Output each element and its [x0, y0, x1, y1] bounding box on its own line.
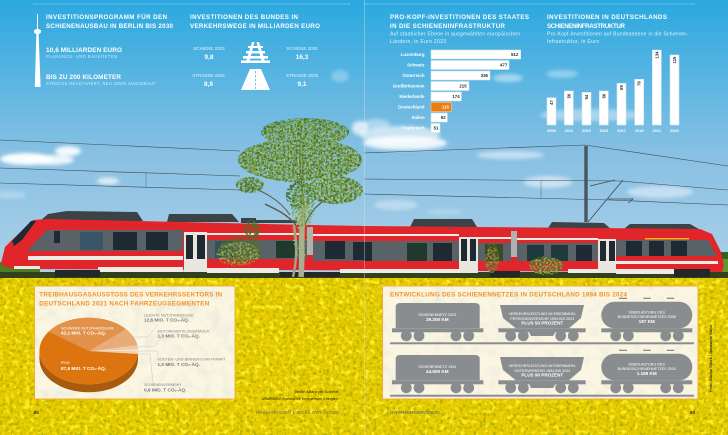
- rail 2025 value: 16,3: [296, 54, 309, 61]
- heading: emissions: TREIBHAUSGASAUSSTOSS DES VERKEHRSSEKTORS IN: [39, 292, 222, 299]
- wagon: freight traffic: VERKEHRSLEISTUNG IM EISENBAHN-: [509, 364, 577, 368]
- bar chart: countries: Italien: [412, 115, 425, 120]
- roof equipment: [40, 211, 704, 232]
- dark foliage layer: [236, 118, 363, 209]
- overhead wires and mast: [0, 140, 728, 222]
- panel: federal transport investment: [190, 14, 320, 90]
- column chart: years: [547, 50, 680, 133]
- column chart: years: 2011: [565, 128, 574, 133]
- wagon: network 1994: [392, 355, 483, 393]
- bogies: [55, 269, 710, 277]
- heading: German rail investment: SCHIENENINFRASTRUKTUR: [547, 23, 626, 30]
- doors: [184, 232, 616, 273]
- road 2025 value: 9,1: [298, 81, 307, 88]
- heading: emissions: DEUTSCHLAND 2021 NACH FAHRZEUGSEGMENTEN: [39, 301, 210, 308]
- rapeseed field: [0, 278, 728, 435]
- label: shipping: [158, 357, 226, 367]
- wagon: overload 2024: [601, 350, 692, 393]
- panel: per-capita investment bar chart: [390, 14, 529, 132]
- rail 2023 value: [193, 46, 225, 61]
- heading: federal investment: [190, 14, 320, 30]
- rail 2023 value: SCHIENE 2023: [193, 46, 225, 51]
- stat: planning costs: [46, 47, 122, 59]
- road 2025 value: STRASSE 2025: [286, 73, 319, 78]
- heading: per-capita state investment: PRO-KOPF-INVESTITIONEN DES STAATES: [390, 14, 529, 21]
- bar chart: countries: Großbritannien: [393, 84, 425, 89]
- icon: Berlin TV tower: [34, 14, 41, 87]
- heading: rail network: ENTWICKLUNG DES SCHIENENNETZES IN DEUTSCHLAND 1994 BIS 2024: [390, 292, 627, 299]
- page number left: 62: [34, 410, 40, 415]
- heading: German rail investment: Infrastruktur, in Euro: [547, 39, 599, 45]
- wagon: network 2023: [392, 303, 483, 341]
- page number right: 63: [690, 410, 696, 415]
- icon: rail track: [241, 42, 270, 63]
- wagon: overload 2024: ÜBERLASTUNG DES: [629, 362, 665, 366]
- bar chart: countries: 512: [511, 52, 519, 57]
- road 2023 value: STRASSE 2023: [192, 73, 225, 78]
- bar chart: countries: [393, 50, 521, 132]
- wagon: overload 2008: 187 KM: [639, 319, 655, 324]
- heading: federal investment: INVESTITIONEN DES BUNDES IN: [190, 14, 299, 21]
- road 2023 value: 8,9: [204, 81, 213, 88]
- wagon: overload 2008: [601, 298, 692, 341]
- top dotted rules: [33, 3, 695, 5]
- bar chart: countries: Niederlande: [399, 94, 425, 99]
- wagon: passenger traffic: [498, 305, 586, 341]
- car connectors: [307, 227, 517, 257]
- wagon: freight traffic: [498, 357, 586, 393]
- source credit: Quelle: Allianz pro Schiene,: [294, 390, 339, 394]
- rail 2025 value: SCHIENE 2025: [286, 46, 318, 51]
- rail 2023 value: 9,8: [205, 54, 214, 61]
- wagon: network 1994: 44.600 KM: [426, 369, 449, 374]
- label: motorcycles: [158, 328, 210, 339]
- column chart: years: 69: [619, 85, 624, 90]
- sky background: [0, 0, 728, 280]
- leader lines: [125, 324, 160, 383]
- wagon: passenger traffic: PLUS 50 PROZENT: [521, 321, 563, 326]
- bar chart: countries: Schweiz: [407, 63, 425, 68]
- label: rail transport: SCHIENENVERKEHR: [144, 382, 181, 387]
- bar chart: countries: Luxemburg: [401, 52, 425, 57]
- panel: German rail investment column chart: [547, 14, 688, 133]
- column chart: years: 2017: [617, 128, 626, 133]
- foreground shrubs: [216, 220, 563, 275]
- wagon: overload 2008: ÜBERLASTUNG DES: [629, 310, 665, 314]
- icon: road: [241, 69, 270, 90]
- train: [1, 211, 724, 277]
- clouds: [0, 70, 693, 215]
- heading: per-capita state investment: Auf staatlicher Ebene in ausgewählten europäischen: [390, 32, 520, 38]
- rail lower: [390, 395, 694, 397]
- heading: German rail investment: INVESTITIONEN IN DEUTSCHLANDS: [547, 14, 667, 21]
- windows: [12, 221, 687, 261]
- wagon: overload 2008: BUNDESSCHIENENNETZES 2008: [618, 315, 676, 319]
- label: shipping: KÜSTEN- UND BINNENSCHIFFFAHRT: [158, 357, 226, 362]
- stat: kilometres: STRECKE REAKTIVIERT, NEU ODER AUSGEBAUT: [46, 81, 156, 86]
- source credit: [262, 390, 339, 401]
- bar chart: countries: 477: [500, 63, 508, 68]
- pie chart: vehicle segments: SCHWERE NUTZFAHRZEUGE: [61, 326, 114, 330]
- white stripes: [14, 233, 718, 274]
- bar chart: countries: 92: [441, 115, 446, 120]
- column chart: years: 2013: [582, 128, 592, 133]
- column chart: years: 115: [672, 56, 677, 63]
- heading: Berlin programme: [46, 14, 174, 30]
- wagon: passenger traffic: VERKEHRSLEISTUNG IM EISENBAHN-: [509, 312, 577, 316]
- column chart: years: 2023: [670, 128, 680, 133]
- stat: planning costs: PLANUNGS- UND BAUKOSTEN: [46, 54, 117, 59]
- vertical photo credit: Foto: Adobe Stock / Deutsche Bahn: [709, 324, 713, 392]
- label: light commercial vehicles: LEICHTE NUTZFAHRZEUGE: [144, 312, 194, 317]
- pie chart: vehicle segments: PKW: [61, 361, 70, 365]
- column chart: years: 47: [549, 100, 554, 105]
- heading: per-capita state investment: [390, 14, 529, 45]
- wagon: network 2023: SCHIENENNETZ 2023: [418, 313, 456, 317]
- column chart: years: 2021: [652, 128, 662, 133]
- wagon: freight traffic: GÜTERVERKEHR 1994 BIS 2022: [514, 369, 570, 373]
- heading: Berlin programme: SCHIENENAUSBAU IN BERLIN BIS 2030: [46, 23, 174, 30]
- bar chart: countries: Österreich: [403, 73, 425, 78]
- stat: planning costs: 10,6 MILLIARDEN EURO: [46, 47, 122, 54]
- heading: German rail investment: [547, 14, 688, 45]
- column chart: years: 54: [584, 94, 589, 99]
- wagon: network 2023: 39.200 KM: [426, 317, 449, 322]
- column chart: years: 2019: [635, 128, 644, 133]
- column chart: years: 56: [566, 93, 571, 98]
- ground behind train: [0, 252, 728, 278]
- wagon: passenger traffic: PERSONENVERKEHR 1994 BIS 2023: [510, 317, 574, 321]
- label: shipping: 1,5 MIO. T CO₂-ÄQ.: [158, 361, 200, 367]
- stat: kilometres: BIS ZU 200 KILOMETER: [46, 74, 121, 81]
- label: rail transport: 0,9 MIO. T CO₂-ÄQ.: [144, 386, 186, 392]
- rail upper: [390, 342, 694, 344]
- wagon: overload 2024: 1.169 KM: [637, 371, 657, 376]
- bar chart: countries: 174: [452, 94, 460, 99]
- pie chart: vehicle segments: 42,1 MIO. T CO₂-ÄQ.: [61, 330, 106, 336]
- heading: emissions: [39, 292, 222, 308]
- heading: Berlin programme: INVESTITIONSPROGRAMM FÜR DEN: [46, 14, 168, 21]
- road 2023 value: [192, 73, 225, 88]
- label: motorcycles: MOTORISIERTE ZWEIRÄDER: [158, 328, 210, 333]
- column chart: years: 134: [654, 51, 659, 58]
- column chart: years: 2009: [547, 128, 557, 133]
- label: motorcycles: 1,3 MIO. T CO₂-ÄQ.: [158, 333, 200, 339]
- panel: Berlin investment programme: [34, 14, 174, 87]
- heading: federal investment: VERKEHRSWEGE IN MILLIARDEN EURO: [190, 23, 320, 30]
- footer right: KRAFTFAHRWERK BRANDENBURG: [390, 410, 440, 415]
- stat: kilometres: [46, 74, 156, 86]
- light foliage layer: [240, 121, 361, 260]
- bar chart: countries: Frankreich: [402, 126, 425, 131]
- label: rail transport: [144, 382, 186, 392]
- label: light commercial vehicles: [144, 312, 194, 323]
- heading: German rail investment: Pro-Kopf-Investitionen auf Bundesebene in die Schienen-: [547, 32, 688, 38]
- bar chart: countries: Deutschland: [398, 105, 425, 110]
- panel: greenhouse gas emissions: [34, 286, 235, 399]
- mid foliage layer: [236, 118, 363, 227]
- pie chart: vehicle segments: 87,6 MIO. T CO₂-ÄQ.: [61, 365, 106, 371]
- page fold: [363, 0, 366, 435]
- tree: [236, 118, 363, 277]
- column chart: years: 76: [637, 81, 642, 86]
- heading: per-capita state investment: Ländern, in Euro 2023: [390, 39, 446, 45]
- column chart: years: 2015: [599, 128, 609, 133]
- panel: rail network development: [382, 286, 698, 399]
- source credit: UBA/BMDV, Agentur für Erneuerbare Energien: [262, 397, 338, 401]
- heading: per-capita state investment: IN DIE SCHIENENINFRASTRUKTUR: [390, 23, 506, 30]
- window bands: [28, 230, 717, 261]
- bar chart: countries: 51: [434, 126, 439, 131]
- bar chart: countries: 336: [481, 73, 489, 78]
- red body: [1, 219, 724, 272]
- wagon: network 1994: SCHIENENNETZ 1994: [418, 365, 456, 369]
- bar chart: countries: 215: [459, 84, 467, 89]
- footer left: BRANDENBURG E-MOBILITÄT GLOBE: [256, 410, 339, 415]
- rail 2025 value: [286, 46, 318, 61]
- pie chart: vehicle segments: [39, 318, 138, 392]
- bar chart: countries: 115: [442, 105, 450, 110]
- label: light commercial vehicles: 12,6 MIO. T CO₂-ÄQ.: [144, 317, 189, 323]
- wagon: freight traffic: PLUS 90 PROZENT: [521, 373, 563, 378]
- road 2025 value: [286, 73, 319, 88]
- wagon: overload 2024: BUNDESSCHIENENNETZES 2024: [618, 367, 676, 371]
- column chart: years: 56: [601, 93, 606, 98]
